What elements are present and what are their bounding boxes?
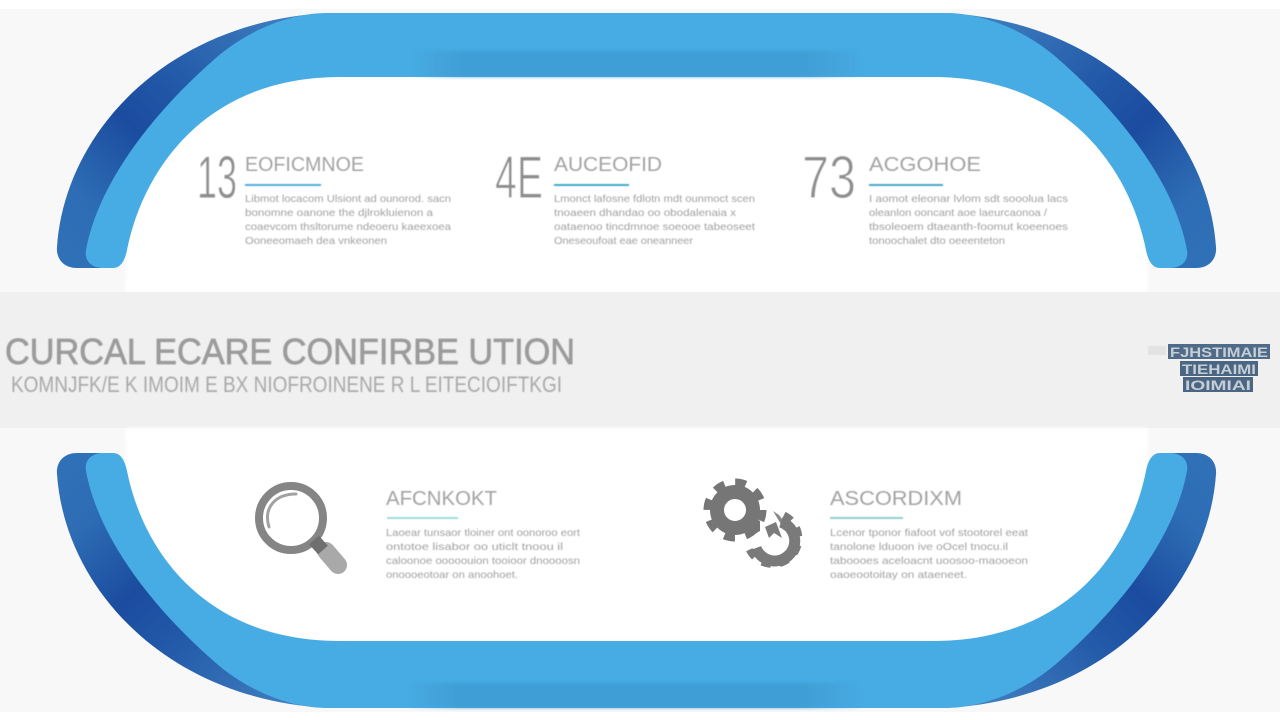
body 1: Ooneeomaeh dea vnkeonen (245, 235, 387, 247)
step 3 (802, 144, 1068, 247)
small hexagon (742, 516, 760, 536)
body 3: oleanlon ooncant aoe laeurcaonoa / (869, 207, 1047, 219)
body 5: oaoeootoitay on ataeneet. (830, 569, 967, 581)
body 5: taboooes aceloacnt uoosoo-maooeon (830, 555, 1028, 567)
body 1: Libmot locacom Ulsiont ad ounorod. sacn (245, 193, 451, 205)
heading 5: ASCORDIXM (830, 488, 962, 510)
body 1: bonomne oanone the djlrokluienon a (245, 207, 433, 219)
light blue arch (86, 453, 1187, 708)
logo block (1148, 344, 1270, 393)
body 3 (869, 193, 1068, 247)
body 5 (830, 527, 1028, 581)
heading 4: AFCNKOKT (386, 488, 497, 510)
light blue arch (86, 13, 1187, 268)
underline 3 (869, 184, 943, 186)
underline 2 (554, 184, 629, 186)
number 73: 73 (802, 144, 856, 211)
body 1: coaevcom thsltorume ndeoeru kaeexoea (245, 221, 451, 233)
top shaded strip (415, 51, 860, 77)
body 1 (245, 193, 451, 247)
large gear (708, 483, 762, 537)
body 3: I aomot eleonar lvlom sdt sooolua lacs (869, 193, 1068, 205)
heading 2: AUCEOFID (554, 154, 662, 176)
body 3: tonoochalet dto oeeenteton (869, 235, 1005, 247)
number 13: 13 (197, 144, 237, 211)
underline 4 (387, 517, 458, 519)
left dark arch (57, 453, 330, 708)
body 5: tanolone lduoon ive oOcel tnocu.il (830, 541, 1008, 553)
body 2: Oneseoufoat eae oneanneer (554, 235, 694, 247)
body 2: Lmonct lafosne fdlotn mdt ounmoct scen (554, 193, 755, 205)
step 4 text (386, 488, 580, 581)
body 2: tnoaeen dhandao oo obodalenaia x (554, 207, 737, 219)
body 4: caloonoe ooooouion tooioor dnoooosn (386, 555, 580, 567)
heading 1: EOFICMNOE (245, 154, 364, 176)
step 5 text (830, 488, 1028, 581)
body 2: oataenoo tincdmnoe soeooe tabeoseet (554, 221, 755, 233)
logo block: IOIMIAI (1185, 377, 1251, 393)
body 3: tbsoleoem dtaeanth-foomut koeenoes (869, 221, 1068, 233)
logo block: FJHSTIMAIE (1170, 344, 1268, 360)
body 4: ontotoe lisabor oo uticlt tnoou il (386, 541, 563, 553)
second gear (749, 515, 799, 564)
main title: CURCAL ECARE CONFIRBE UTION (5, 331, 575, 372)
logo block: TIEHAIMI (1182, 361, 1256, 377)
heading 3: ACGOHOE (869, 154, 981, 176)
underline 1 (245, 184, 321, 186)
body 4 (386, 527, 580, 581)
top arch band (57, 13, 1216, 294)
body 2 (554, 193, 755, 247)
step 1 (197, 144, 451, 247)
subtitle: KOMNJFK/E K IMOIM E BX NIOFROINENE R L EITECIOIFTKGI (11, 372, 562, 397)
left dark arch (57, 13, 330, 268)
icon: gears (708, 483, 799, 564)
bottom arch band (57, 428, 1216, 708)
bottom shaded strip (410, 683, 860, 708)
body 5: Lcenor tponor fiafoot vof stootorel eeat (830, 527, 1028, 539)
icon: magnifying glass (259, 486, 338, 565)
underline 5 (830, 517, 903, 519)
body 4: onoooeotoar on anoohoet. (386, 569, 518, 581)
right dark arch (943, 13, 1216, 268)
broken fragment (765, 522, 782, 538)
right dark arch (943, 453, 1216, 708)
number 4E: 4E (495, 144, 543, 211)
body 4: Laoear tunsaor tloiner ont oonoroo eort (386, 527, 580, 539)
middle title band (0, 292, 1280, 428)
step 2 (495, 144, 755, 247)
